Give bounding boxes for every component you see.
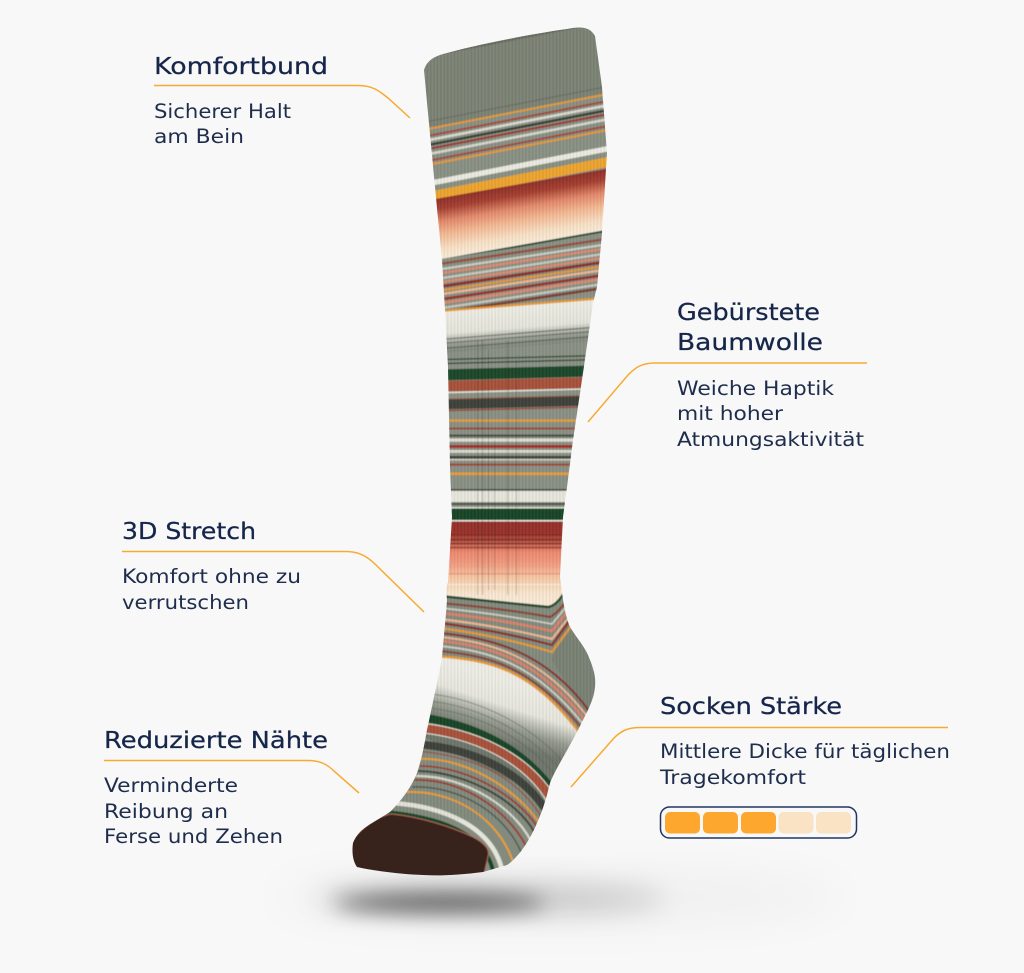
- callout: 3D Stretch: 3D Stretch: [122, 517, 256, 545]
- callout: Reduzierte Nähte: Ferse und Zehen: [104, 825, 283, 848]
- callout: Komfortbund: Sicherer Halt: [154, 100, 291, 123]
- callout: Reduzierte Nähte: Reduzierte Nähte: [104, 726, 328, 754]
- callout: Komfortbund: Komfortbund: [154, 52, 328, 80]
- sock illustration: [352, 28, 607, 876]
- callout: Reduzierte Nähte: [104, 726, 359, 848]
- thickness meter: [660, 807, 856, 838]
- foot base: [446, 596, 566, 612]
- callout: 3D Stretch: [122, 517, 424, 614]
- callout: Socken Stärke: Tragekomfort: [659, 766, 806, 789]
- calf V stripes: [440, 593, 590, 727]
- callout: Reduzierte Nähte: Verminderte: [104, 774, 238, 797]
- callout: Socken Stärke: Mittlere Dicke für täglichen: [660, 740, 950, 763]
- vertical streak texture: [477, 340, 517, 595]
- sock cuff: [424, 28, 607, 200]
- foot band edge: [436, 656, 579, 732]
- foot thin lines: [432, 694, 558, 757]
- white to grey foot band: [426, 657, 578, 796]
- callout: Komfortbund: [154, 52, 410, 148]
- foot stripes: [385, 717, 558, 878]
- callout: Socken Stärke: [571, 692, 950, 789]
- callout: Gebürstete Baumwolle: Weiche Haptik: [677, 377, 835, 400]
- floor shadow: [270, 869, 850, 925]
- lower gradient band: [446, 521, 563, 606]
- callout: 3D Stretch: Komfort ohne zu: [122, 565, 301, 588]
- callout: Gebürstete Baumwolle: Baumwolle: [677, 328, 823, 356]
- ribbing texture: [391, 94, 606, 820]
- green and brown bands: [448, 354, 586, 412]
- callout: Gebürstete Baumwolle: [588, 298, 867, 451]
- callout: Reduzierte Nähte: Reibung an: [104, 800, 228, 823]
- callout: Gebürstete Baumwolle: mit hoher: [677, 402, 784, 425]
- upper fine stripes: [429, 93, 607, 200]
- callout: Socken Stärke: Socken Stärke: [660, 692, 842, 720]
- callout: Komfortbund: am Bein: [154, 125, 244, 148]
- white to grey band: [445, 297, 594, 349]
- toe cap: [345, 814, 488, 880]
- upper gradient band: [436, 168, 606, 260]
- mid fine stripes: [449, 418, 576, 522]
- callout: Gebürstete Baumwolle: Atmungsaktivität: [677, 428, 864, 451]
- callout: 3D Stretch: verrutschen: [122, 591, 249, 614]
- callout: Gebürstete Baumwolle: Gebürstete: [677, 298, 820, 326]
- second fine stripe group: [442, 238, 602, 310]
